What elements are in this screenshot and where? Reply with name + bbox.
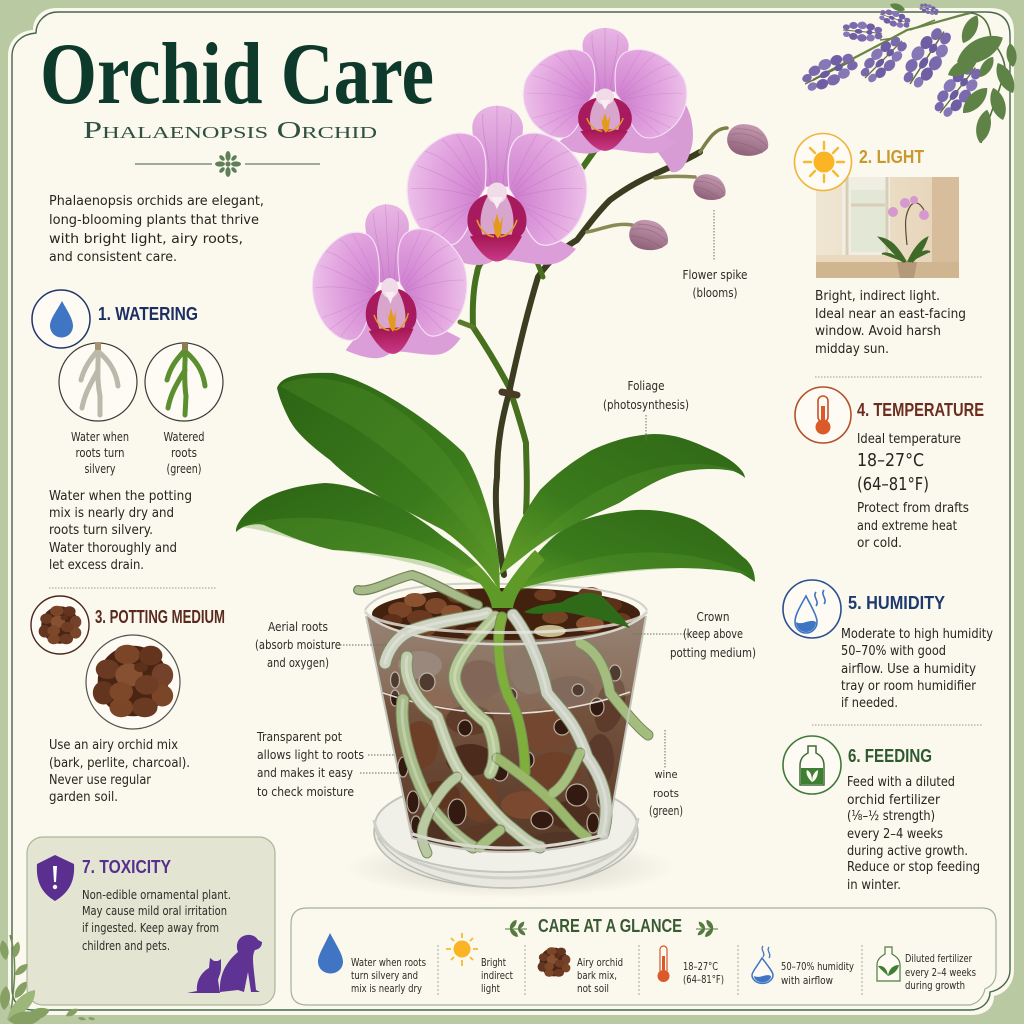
label: flower spike [682,210,748,300]
label: transparent pot: and makes it easy [257,766,353,780]
label: transparent pot: allows light to roots [257,748,364,762]
temperature text: and extreme heat [857,519,957,534]
label: green roots [649,730,683,818]
watering text: roots turn silvery. [49,523,153,538]
plant: saucer [374,776,638,888]
label: aerial roots [255,620,388,670]
plant: leaves [236,373,755,628]
heading: feeding: 6. FEEDING [848,746,932,766]
label: transparent pot [256,730,400,799]
potting text [49,738,190,805]
icon: shield [37,855,74,901]
watering text: Water when the potting [49,489,192,504]
feeding text [847,775,980,893]
plant: pot shadow [345,838,675,898]
glass tint [366,616,646,712]
item: medium: not soil [577,983,609,995]
decoration: lavender and leaves top right [798,1,1019,144]
top medium [372,587,640,640]
panel: light [794,134,966,357]
leaf: left upper [277,373,500,592]
watering text [49,489,192,573]
item: light [446,933,513,995]
label: aerial roots: Aerial roots [268,620,328,634]
caption: silvery roots: roots turn [76,446,124,460]
plant: left flower [308,200,471,361]
item: fertilizer: every 2–4 weeks [905,967,976,979]
item: water: mix is nearly dry [351,983,422,995]
light text: window. Avoid harsh [815,324,941,339]
item: light: Bright [481,957,506,969]
label: crown: potting medium) [670,646,756,660]
item: medium: Airy orchid [577,957,623,969]
decoration: leaves bottom left [0,935,95,1024]
watering text: mix is nearly dry and [49,506,174,521]
item: light: indirect [481,970,513,982]
heading: temperature: 4. TEMPERATURE [857,400,984,420]
intro text: with bright light, airy roots, [49,232,243,247]
item: medium [538,947,623,995]
humidity text: tray or room humidifier [841,679,977,694]
icon: green roots [145,342,223,421]
subtitle: Phalaenopsis Orchid [83,118,377,144]
feeding text: Reduce or stop feeding [847,860,980,875]
label: crown: (keep above [683,627,743,641]
panel: feeding [783,736,980,893]
caption: silvery roots [71,430,129,476]
item: water [318,933,426,995]
intro text [49,194,264,265]
label: transparent pot: Transparent pot [256,730,342,744]
feeding text: Feed with a diluted [847,775,955,790]
icon: bark large [86,635,180,729]
humidity text: airflow. Use a humidity [841,662,976,677]
panel: care at a glance [291,908,996,1005]
item: humidity: with airflow [781,975,833,987]
label: green roots: roots [653,788,679,800]
heading: light: 2. LIGHT [859,147,924,167]
light text [815,289,966,357]
caption: green roots: roots [171,446,197,460]
crown sheath [465,550,545,608]
humidity text [841,627,993,711]
caption: green roots: (green) [166,462,202,476]
heading: toxicity: 7. TOXICITY [82,857,171,877]
bark pieces [398,646,631,852]
item: water: turn silvery and [351,970,418,982]
caption: green roots: Watered [164,430,204,444]
potting text: Never use regular [49,773,152,788]
intro text: and consistent care. [49,250,177,265]
item: temperature [658,946,724,986]
temperature text [857,432,969,551]
plant: pot with medium and roots [360,583,655,890]
heading: potting medium: 3. POTTING MEDIUM [95,607,225,627]
temperature text: 18–27°C [857,450,924,471]
icon: humidity drop [783,580,841,638]
panel: potting medium [31,596,225,805]
potting text: garden soil. [49,790,118,805]
holes [390,665,621,834]
title: Orchid Care [40,26,434,123]
light text: Ideal near an east-facing [815,307,966,322]
label: green roots: wine [654,769,678,781]
leaf: pot leaf [524,593,630,628]
potting text: Use an airy orchid mix [49,738,178,753]
item: medium: bark mix, [577,970,617,982]
label: flower spike: Flower spike [682,268,748,282]
icon: water drop [32,290,90,348]
intro text: Phalaenopsis orchids are elegant, [49,194,264,209]
leaf: left lower [236,483,500,592]
feeding text: orchid fertilizer [847,793,941,808]
panel: watering [32,290,223,573]
icon: thermometer [795,387,851,443]
leaf: right upper [499,434,745,575]
heading: watering: 1. WATERING [98,304,198,324]
feeding text: during active growth. [847,844,968,859]
toxicity text: Non-edible ornamental plant. [82,888,231,902]
ornament leaves [505,919,718,939]
pot glass outline [366,616,646,852]
humidity text: if needed. [841,696,898,711]
light text: midday sun. [815,342,889,357]
temperature text: Protect from drafts [857,501,969,516]
item: fertilizer [877,947,976,992]
icon: fertilizer bottle [783,736,841,794]
roots in pot [385,613,648,853]
saucer front rim [374,818,638,878]
plant: stems [460,128,727,575]
item: temperature: (64–81°F) [683,974,724,986]
caption: green roots [164,430,204,476]
leaf: right lower [499,510,755,600]
feeding text: every 2–4 weeks [847,827,943,842]
label: foliage: (photosynthesis) [603,398,689,412]
panel: humidity [783,580,993,711]
caption: silvery roots: Water when [71,430,129,444]
icon: sun [794,134,852,190]
ornament divider [135,151,320,177]
light text: Bright, indirect light. [815,289,940,304]
plant: middle flower [407,105,587,265]
toxicity text: if ingested. Keep away from [82,921,219,935]
caption: silvery roots: silvery [84,462,116,476]
label: transparent pot: to check moisture [257,785,354,799]
plant: aerial roots [358,575,478,605]
icon: silvery roots [59,342,137,421]
potting text: (bark, perlite, charcoal). [49,756,190,771]
pot rim [365,583,647,644]
intro text: long-blooming plants that thrive [49,213,259,228]
item: humidity: 50–70% humidity [781,961,854,973]
label: crown: Crown [696,610,730,624]
plant: top flower [523,28,693,172]
temperature text: Ideal temperature [857,432,961,447]
label: green roots: (green) [649,804,683,818]
temperature text: or cold. [857,536,902,551]
label: aerial roots: (absorb moisture [255,638,341,652]
label: crown [632,610,756,660]
item: humidity [752,946,854,987]
humidity text: Moderate to high humidity [841,627,993,642]
label: foliage: Foliage [628,379,664,393]
item: fertilizer: Diluted fertilizer [905,953,973,965]
panel: toxicity [27,837,275,1005]
humidity text: 50–70% with good [841,644,946,659]
light photo [816,177,959,278]
icon: cat and dog [187,935,262,993]
panel: temperature [795,387,984,551]
label: flower spike: (blooms) [692,286,738,300]
item: water: Water when roots [351,957,426,969]
feeding text: (⅛–½ strength) [847,809,935,824]
toxicity text: May cause mild oral irritation [82,904,227,918]
plant: flower buds [626,120,772,256]
label: foliage [603,379,689,442]
toxicity text [82,888,231,953]
label: aerial roots: and oxygen) [267,656,329,670]
toxicity text: children and pets. [82,939,170,953]
item: light: light [481,983,500,995]
heading: care at a glance: CARE AT A GLANCE [538,916,682,936]
item: temperature: 18–27°C [683,961,718,973]
feeding text: in winter. [847,878,901,893]
watering text: let excess drain. [49,558,144,573]
watering text: Water thoroughly and [49,541,177,556]
item: fertilizer: during growth [905,980,965,992]
temperature text: (64–81°F) [857,474,929,495]
icon: bark small [31,596,89,654]
heading: humidity: 5. HUMIDITY [848,593,945,613]
